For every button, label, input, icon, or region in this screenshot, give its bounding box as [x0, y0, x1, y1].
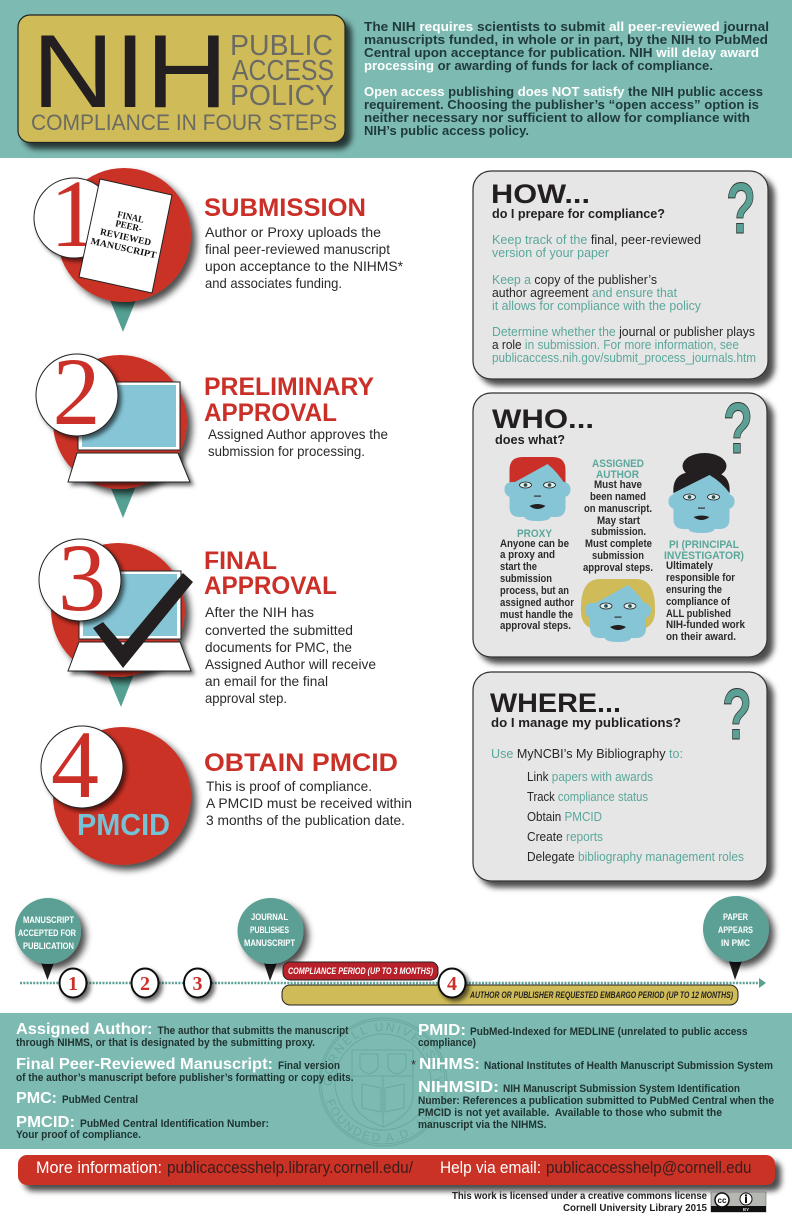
contact bar: Help via email:: [440, 1158, 541, 1177]
compliance period bar: COMPLIANCE PERIOD (UP TO 3 MONTHS): [288, 966, 433, 976]
step 3 text: an email for the final: [205, 673, 328, 689]
intro text: [364, 19, 769, 138]
icon: creative commons badge: BY: [743, 1207, 749, 1212]
icon: question mark: ?: [722, 675, 752, 755]
step marker 2: 2: [140, 973, 150, 995]
proxy text: submission: [500, 573, 552, 585]
compliance period bar: [283, 962, 438, 980]
step 1 icon: FINAL: [116, 210, 145, 226]
assigned author text: Must have: [594, 479, 642, 491]
step 2 text: PRELIMINARY: [204, 373, 374, 401]
where: list: Delegate bibliography management roles: [527, 850, 744, 864]
step 1 icon: 1: [50, 160, 98, 267]
assigned author text: submission: [592, 550, 644, 562]
proxy text: a proxy and: [500, 549, 555, 561]
assigned author text: Must complete: [585, 538, 652, 550]
title plaque: COMPLIANCE IN FOUR STEPS: [31, 110, 337, 135]
glossary: left column: Final Peer-Reviewed Manuscript:: [16, 1056, 273, 1073]
where: list: [491, 747, 744, 864]
panel: how: do I prepare for compliance?: [492, 206, 665, 221]
milestone: journal publishes: MANUSCRIPT: [244, 938, 295, 949]
step 1 text: upon acceptance to the NIHMS*: [205, 258, 404, 274]
proxy text: approval steps.: [500, 620, 571, 632]
step 1 text: and associates funding.: [205, 275, 342, 291]
panel: where: WHERE...: [490, 688, 621, 718]
step 1 icon: [34, 160, 191, 332]
icon: question mark: ?: [723, 389, 753, 469]
assigned author text: been named: [590, 491, 646, 503]
glossary: right column: National Institutes of Health Manuscript Submission System: [484, 1060, 773, 1072]
icon: creative commons badge: cc: [718, 1196, 727, 1205]
proxy text: assigned author: [500, 597, 574, 609]
step 1 icon: REVIEWED: [99, 228, 152, 249]
assigned author text: on manuscript.: [584, 503, 652, 515]
license text: Cornell University Library 2015: [563, 1203, 707, 1214]
milestone: journal publishes: JOURNAL: [251, 912, 288, 923]
how: guidance text: author agreement and ensure that: [492, 286, 677, 300]
step 3 text: APPROVAL: [204, 572, 337, 600]
license text: [452, 1191, 707, 1214]
step 1 text: final peer-reviewed manuscript: [205, 241, 390, 257]
step 4 text: This is proof of compliance.: [206, 778, 372, 794]
milestone: manuscript accepted: ACCEPTED FOR: [18, 928, 76, 939]
proxy text: must handle the: [500, 609, 573, 621]
assigned author text: submission.: [591, 526, 646, 538]
assigned author text: ASSIGNED: [592, 458, 644, 470]
step 1 text: SUBMISSION: [204, 194, 366, 222]
milestone: manuscript accepted: [15, 898, 81, 980]
contact bar: publicaccesshelp@cornell.edu: [546, 1158, 752, 1177]
glossary: right column: PMCID is not yet available. Available to those who submit the: [418, 1107, 722, 1119]
contact bar: [18, 1155, 775, 1185]
step 4 text: OBTAIN PMCID: [204, 749, 398, 777]
step 3 text: Assigned Author will receive: [205, 656, 376, 672]
how: guidance text: Determine whether the journal or publisher plays: [492, 325, 755, 339]
glossary: left column: Your proof of compliance.: [16, 1129, 141, 1141]
where: list: Track compliance status: [527, 790, 648, 804]
glossary: left column: PMC:: [16, 1090, 57, 1107]
glossary: right column: NIHMSID:: [418, 1079, 499, 1096]
panel: who: [473, 389, 767, 657]
intro text: requirement. Choosing the publisher’s “open access” option is: [364, 97, 759, 112]
step marker 1: [60, 968, 86, 998]
pi text: PI (PRINCIPAL: [669, 539, 739, 551]
panel: who: WHO...: [492, 404, 594, 434]
glossary: left column: of the author’s manuscript before publisher’s formatting or copy edits.: [16, 1072, 354, 1084]
step 3 icon: 3: [58, 524, 106, 631]
glossary: left column: PubMed Central: [62, 1094, 138, 1106]
glossary: right column: Number: References a publication submitted to PubMed Central when the: [418, 1095, 774, 1107]
icon: question mark: ?: [726, 169, 756, 249]
milestone: paper appears: APPEARS: [718, 925, 753, 936]
timeline: [15, 896, 769, 1005]
panel: how: [473, 169, 768, 379]
step 1 icon: MANUSCRIPT: [90, 237, 158, 261]
how: guidance text: Keep track of the final, peer-reviewed: [492, 233, 701, 247]
step marker 4: [438, 968, 466, 998]
intro text: NIH’s public access policy.: [364, 123, 529, 138]
glossary: right column: [411, 1022, 774, 1131]
glossary: right column: manuscript via the NIHMS.: [418, 1119, 546, 1131]
pi text: [664, 539, 745, 643]
title plaque: NIH: [32, 14, 228, 130]
icon: creative commons badge: [711, 1192, 766, 1212]
pi text: ALL published: [666, 608, 731, 620]
cornell seal watermark: CORNELL UNIVERSITY: [324, 1022, 442, 1086]
step 4 text: [204, 749, 412, 828]
step 1 text: [204, 194, 404, 291]
license text: This work is licensed under a creative commons license: [452, 1191, 707, 1202]
proxy text: [500, 528, 574, 632]
glossary: right column: *: [411, 1057, 416, 1072]
intro text: Open access publishing does NOT satisfy the NIH public access: [364, 84, 763, 99]
where: list: Obtain PMCID: [527, 810, 602, 824]
title plaque: POLICY: [230, 80, 334, 112]
how: guidance text: it allows for compliance with the policy: [492, 299, 702, 313]
step marker 2: [132, 968, 158, 998]
panel: where: [473, 672, 767, 881]
glossary band: [0, 1013, 792, 1149]
step 3 text: approval step.: [205, 690, 287, 706]
proxy text: PROXY: [517, 528, 553, 540]
glossary: left column: Assigned Author:: [16, 1021, 152, 1038]
panel: who: does what?: [495, 432, 565, 447]
step 2 text: APPROVAL: [204, 399, 337, 427]
where: list: Create reports: [527, 830, 603, 844]
milestone: paper appears: IN PMC: [721, 938, 750, 949]
where: list: Use MyNCBI’s My Bibliography to:: [491, 747, 683, 761]
milestone: paper appears: [703, 896, 769, 980]
step 3 text: After the NIH has: [205, 604, 314, 620]
contact bar: More information:: [36, 1158, 162, 1177]
step 3 text: converted the submitted: [205, 622, 353, 638]
glossary: right column: NIHMS:: [419, 1056, 480, 1073]
step 4 icon: PMCID: [77, 807, 170, 842]
proxy text: start the: [500, 561, 537, 573]
milestone: journal publishes: [238, 898, 304, 981]
assigned author text: [583, 458, 653, 574]
intro text: Central upon acceptance for publication. NIH will delay award: [364, 45, 759, 60]
glossary: right column: compliance): [418, 1037, 476, 1049]
cornell seal watermark: [318, 1018, 448, 1146]
intro text: neither necessary nor sufficient to allow for compliance with: [364, 110, 750, 125]
step 1 text: Author or Proxy uploads the: [205, 224, 381, 240]
milestone: journal publishes: PUBLISHES: [250, 925, 289, 936]
step 4 text: A PMCID must be received within: [206, 795, 412, 811]
title plaque: PUBLIC: [230, 30, 333, 62]
step 3 text: documents for PMC, the: [205, 639, 352, 655]
step 2 icon: 2: [52, 338, 100, 445]
step 2 icon: [36, 338, 190, 518]
glossary: right column: PMID:: [418, 1022, 466, 1039]
step marker 1: 1: [68, 973, 78, 995]
step 2 text: [204, 373, 388, 459]
step marker 3: [184, 968, 211, 998]
step marker 4: 4: [447, 973, 457, 995]
how: guidance text: a role in submission. For more information, see: [492, 338, 739, 352]
step 3 text: FINAL: [204, 547, 277, 575]
header band: [0, 0, 792, 158]
pi text: on their award.: [666, 631, 736, 643]
assigned author text: approval steps.: [583, 562, 653, 574]
step 4 text: 3 months of the publication date.: [206, 812, 405, 828]
proxy face: [504, 457, 570, 521]
proxy text: Anyone can be: [500, 538, 569, 550]
intro text: processing or awarding of funds for lack of compliance.: [364, 58, 713, 73]
step 1 icon: PEER-: [114, 219, 143, 235]
pi text: Ultimately: [666, 560, 713, 572]
glossary: right column: PubMed-Indexed for MEDLINE (unrelated to public access: [470, 1026, 748, 1038]
glossary: left column: The author that submitts the manuscript: [158, 1025, 349, 1037]
step 2 text: Assigned Author approves the: [208, 426, 388, 442]
contact bar: publicaccesshelp.library.cornell.edu/: [167, 1158, 413, 1177]
assigned author text: AUTHOR: [596, 469, 639, 481]
glossary: right column: NIH Manuscript Submission System Identification: [503, 1083, 740, 1095]
cornell seal watermark: FOUNDED A.D. 1865: [326, 1099, 438, 1142]
embargo period bar: [282, 985, 738, 1005]
step 4 icon: [41, 711, 191, 865]
pi text: responsible for: [666, 572, 735, 584]
step 3 text: [204, 547, 376, 706]
step marker 3: 3: [192, 973, 202, 995]
timeline axis arrow: [20, 978, 766, 988]
milestone: manuscript accepted: MANUSCRIPT: [23, 915, 74, 926]
how: guidance text: [492, 233, 756, 365]
pi text: INVESTIGATOR): [664, 550, 744, 562]
where: list: Link papers with awards: [527, 770, 653, 784]
step 4 icon: 4: [51, 711, 99, 818]
author face: [581, 579, 655, 642]
milestone: paper appears: PAPER: [723, 912, 748, 923]
pi text: compliance of: [666, 596, 730, 608]
pi face: [668, 453, 734, 533]
glossary: left column: PMCID:: [16, 1114, 75, 1131]
how: guidance text: version of your paper: [492, 246, 609, 260]
glossary: left column: PubMed Central Identification Number:: [80, 1118, 269, 1130]
step 2 text: submission for processing.: [208, 443, 365, 459]
how: guidance text: publicaccess.nih.gov/submit_process_journals.htm: [492, 351, 756, 365]
intro text: manuscripts funded, in whole or in part, by the NIH to PubMed: [364, 32, 768, 47]
glossary: left column: [16, 1021, 354, 1141]
title plaque: ACCESS: [232, 55, 334, 87]
glossary: left column: through NIHMS, or that is designated by the submitting proxy.: [16, 1037, 315, 1049]
proxy text: process, but an: [500, 585, 569, 597]
how: guidance text: Keep a copy of the publisher’s: [492, 273, 657, 287]
intro text: The NIH requires scientists to submit all peer-reviewed journal: [364, 19, 769, 34]
step 3 icon: [39, 524, 193, 707]
panel: where: do I manage my publications?: [491, 715, 681, 730]
pi text: ensuring the: [666, 584, 722, 596]
milestone: manuscript accepted: PUBLICATION: [23, 941, 74, 952]
glossary: left column: Final version: [278, 1060, 340, 1072]
assigned author text: May start: [597, 515, 640, 527]
pi text: NIH-funded work: [666, 619, 745, 631]
title plaque: [18, 14, 345, 142]
panel: how: HOW...: [491, 179, 590, 209]
